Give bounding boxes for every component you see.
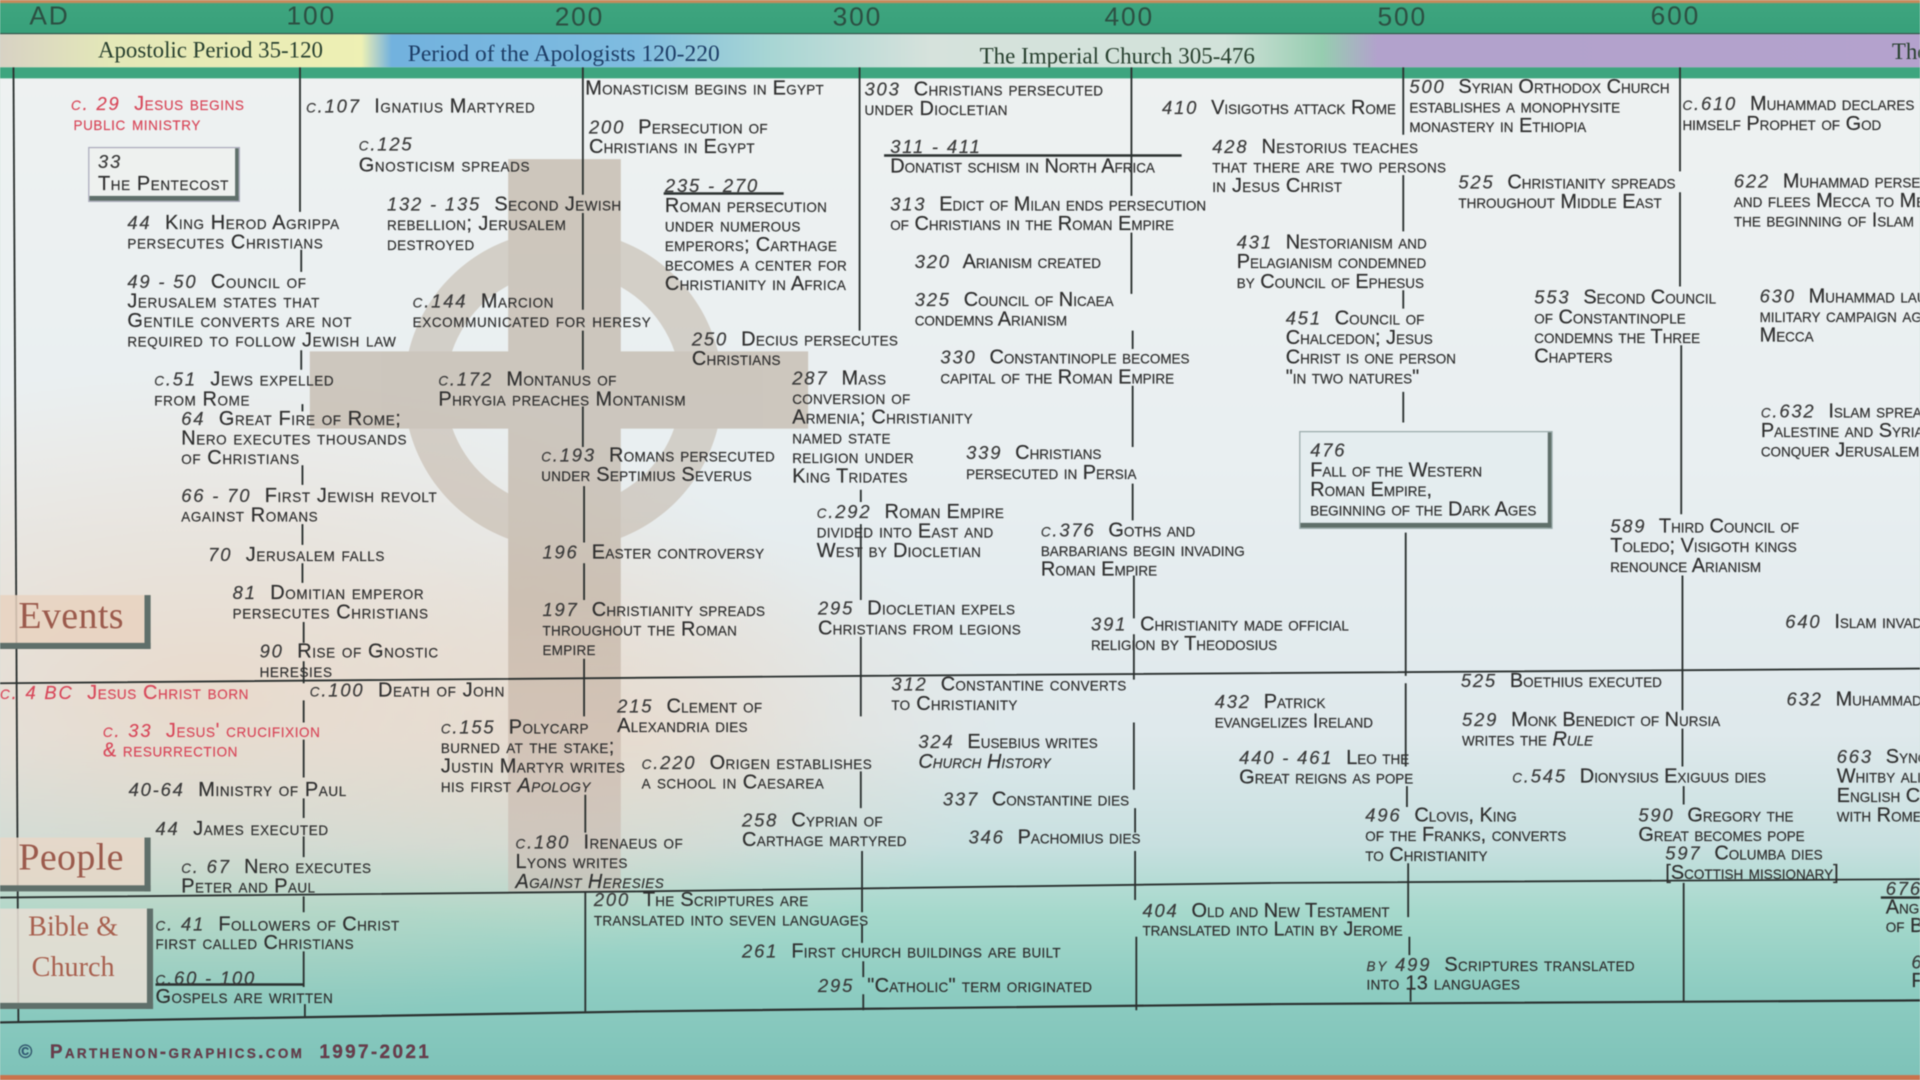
event c.610 bbox=[1682, 94, 1914, 133]
person 529 bbox=[1462, 710, 1720, 749]
person 215 bbox=[617, 697, 762, 736]
event 451: Chalcedon; Jesus bbox=[1286, 327, 1433, 349]
person 529: 529 Monk Benedict of Nursia bbox=[1462, 709, 1720, 731]
event 197: throughout the Roman bbox=[542, 618, 737, 640]
event 287: King Tridates bbox=[792, 465, 908, 487]
church clipped entry bbox=[1911, 954, 1920, 991]
event 81: persecutes Christians bbox=[233, 601, 429, 623]
church 200: 200 The Scriptures are bbox=[594, 889, 808, 911]
person c.67: Peter and Paul bbox=[181, 876, 315, 898]
church c.60-100: c.60 - 100 bbox=[156, 969, 256, 989]
event 525 bbox=[1458, 173, 1676, 212]
event 81 bbox=[232, 582, 429, 623]
person c.33: c. 33 Jesus' crucifixion bbox=[103, 720, 320, 742]
event 200: 200 Persecution of bbox=[589, 116, 768, 138]
event 428: in Jesus Christ bbox=[1212, 175, 1342, 197]
event 66-70 bbox=[180, 485, 438, 527]
person 525: 525 Boethius executed bbox=[1461, 670, 1662, 692]
scale label AD: AD bbox=[29, 1, 70, 31]
event 287: Armenia; Christianity bbox=[792, 407, 973, 429]
event 431: 431 Nestorianism and bbox=[1237, 231, 1427, 253]
event 525: 525 Christianity spreads bbox=[1458, 171, 1676, 193]
event 630: Mecca bbox=[1760, 324, 1814, 347]
event 553: of Constantinople bbox=[1534, 306, 1686, 328]
church c.41: first called Christians bbox=[156, 932, 354, 954]
scale label 100: 100 bbox=[287, 1, 336, 31]
event 235-270: under numerous bbox=[665, 214, 801, 236]
section label: bible and church bbox=[0, 909, 153, 1009]
person 432 bbox=[1215, 692, 1373, 731]
label text: events: Events bbox=[18, 594, 124, 637]
person 440-461: Great reigns as pope bbox=[1239, 767, 1413, 789]
event 90: heresies bbox=[260, 660, 333, 682]
event 49-50: required to follow Jewish law bbox=[127, 329, 397, 351]
period: Apologists: Period of the Apologists 120-220 bbox=[408, 42, 720, 67]
person 44: 44 James executed bbox=[156, 818, 329, 840]
callout text: fall of Rome bbox=[1310, 441, 1537, 520]
event c.107: c.107 Ignatius Martyred bbox=[306, 96, 535, 118]
green strip under periods bbox=[0, 67, 1920, 78]
person 324: Church History bbox=[918, 751, 1051, 773]
event 90 bbox=[260, 640, 439, 682]
event 64: Nero executes thousands bbox=[181, 427, 407, 449]
event 64 bbox=[181, 408, 407, 469]
person c.33: & resurrection bbox=[103, 740, 238, 762]
event 428: that there are two persons bbox=[1212, 156, 1446, 178]
church c.60-100: Gospels are written bbox=[156, 986, 333, 1008]
callout text: fall of Rome: 476 bbox=[1310, 441, 1346, 462]
event 311-411 bbox=[890, 137, 1156, 178]
panel: bible and church bbox=[0, 898, 1920, 1014]
event 70: 70 Jerusalem falls bbox=[208, 544, 385, 566]
event c.51: c.51 Jews expelled bbox=[154, 369, 334, 391]
callout text: fall of Rome: Roman Empire, bbox=[1310, 479, 1432, 501]
event c.144: excommunicated for heresy bbox=[413, 310, 651, 332]
person 590 bbox=[1638, 806, 1805, 845]
bottom orange border bbox=[0, 1075, 1920, 1080]
event c.610: c.610 Muhammad declares bbox=[1682, 93, 1914, 115]
panel: events bbox=[0, 76, 1920, 682]
person 346: 346 Pachomius dies bbox=[969, 827, 1140, 849]
person 597 bbox=[1665, 844, 1839, 883]
event c.193: under Septimius Severus bbox=[541, 464, 752, 486]
event 235-270: emperors; Carthage bbox=[665, 234, 837, 256]
person 432: evangelizes Ireland bbox=[1215, 710, 1373, 732]
person c.67 bbox=[181, 857, 371, 896]
event 64: 64 Great Fire of Rome; bbox=[181, 408, 401, 430]
person c.4 BC: c. 4 BC Jesus Christ born bbox=[0, 682, 249, 704]
event 313 bbox=[890, 193, 1206, 235]
event 66-70: 66 - 70 First Jewish revolt bbox=[181, 485, 437, 507]
event 330: capital of the Roman Empire bbox=[940, 366, 1174, 388]
event 391: religion by Theodosius bbox=[1091, 633, 1277, 655]
event 311-411: Donatist schism in North Africa bbox=[890, 156, 1155, 178]
event c.632 bbox=[1761, 402, 1920, 460]
event 49-50: 49 - 50 Council of bbox=[127, 271, 307, 293]
event 325: condemns Arianism bbox=[915, 309, 1067, 331]
event c.172: c.172 Montanus of bbox=[438, 369, 617, 391]
event 66-70: against Romans bbox=[181, 504, 318, 527]
event 391: 391 Christianity made official bbox=[1091, 613, 1349, 636]
event 200 bbox=[588, 116, 768, 158]
event 303 bbox=[864, 78, 1104, 120]
person c.220: a school in Caesarea bbox=[642, 771, 824, 793]
label text: bible and church: Bible & bbox=[28, 911, 118, 942]
event 303: 303 Christians persecuted bbox=[864, 78, 1103, 100]
church 404 bbox=[1142, 902, 1403, 938]
panel: people bbox=[0, 686, 1920, 894]
event 64: of Christians bbox=[181, 447, 300, 469]
person c.67: c. 67 Nero executes bbox=[181, 856, 371, 878]
event 235-270: Roman persecution bbox=[665, 195, 827, 217]
event 200: Christians in Egypt bbox=[589, 136, 755, 158]
event c.292: c.292 Roman Empire bbox=[817, 501, 1004, 523]
event 339: persecuted in Persia bbox=[966, 462, 1136, 484]
person c.220: c.220 Origen establishes bbox=[642, 752, 872, 774]
event 428: 428 Nestorius teaches bbox=[1212, 136, 1418, 158]
event 431 bbox=[1236, 231, 1427, 293]
event monasticism: Monasticism begins in Egypt bbox=[585, 77, 824, 99]
person 312 bbox=[891, 675, 1126, 714]
event 320: 320 Arianism created bbox=[915, 251, 1101, 273]
event 132-135: rebellion; Jerusalem bbox=[387, 213, 566, 235]
event 196: 196 Easter controversy bbox=[542, 541, 764, 563]
scale label 600: 600 bbox=[1651, 1, 1700, 31]
callout: fall of Rome bbox=[1300, 432, 1551, 528]
event c.376 bbox=[1040, 519, 1245, 580]
event 250: Christians bbox=[692, 348, 781, 370]
event 325: 325 Council of Nicaea bbox=[915, 289, 1114, 311]
person c.155: burned at the stake; bbox=[441, 736, 615, 758]
person c.180: Lyons writes bbox=[516, 851, 628, 873]
person 529: writes the Rule bbox=[1462, 729, 1593, 751]
event 589: renounce Arianism bbox=[1610, 555, 1761, 577]
event 428 bbox=[1212, 136, 1446, 197]
person 590: Great becomes pope bbox=[1638, 824, 1805, 846]
church by 499 bbox=[1367, 956, 1635, 992]
event c.144: c.144 Marcion bbox=[413, 290, 554, 312]
church 295: 295 "Catholic" term originated bbox=[818, 975, 1092, 997]
event 250 bbox=[691, 328, 898, 370]
event 132-135 bbox=[386, 193, 622, 255]
period: Apostolic: Apostolic Period 35-120 bbox=[98, 38, 323, 64]
event c.172 bbox=[438, 369, 686, 410]
person 496: to Christianity bbox=[1365, 844, 1488, 866]
church c.41: c. 41 Followers of Christ bbox=[156, 913, 400, 936]
event 589: 589 Third Council of bbox=[1610, 516, 1799, 538]
event c.376: Roman Empire bbox=[1041, 558, 1157, 580]
event 451: "in two natures" bbox=[1286, 366, 1419, 388]
person 312: 312 Constantine converts bbox=[891, 673, 1126, 696]
event 553: condemns the Three bbox=[1534, 326, 1700, 348]
event 325 bbox=[914, 289, 1114, 331]
event 431: by Council of Ephesus bbox=[1237, 271, 1424, 293]
event c.376: c.376 Goths and bbox=[1041, 519, 1195, 541]
event 132-135: 132 - 135 Second Jewish bbox=[387, 193, 622, 216]
event 287: named state bbox=[792, 426, 891, 448]
event 500: 500 Syrian Orthodox Church bbox=[1409, 76, 1670, 98]
event 622: the beginning of Islam bbox=[1734, 209, 1914, 231]
person 312: to Christianity bbox=[891, 693, 1018, 715]
person c.180: Against Heresies bbox=[516, 871, 664, 893]
person 337: 337 Constantine dies bbox=[943, 789, 1129, 811]
person 324 bbox=[918, 732, 1098, 771]
event 313: 313 Edict of Milan ends persecution bbox=[890, 193, 1206, 216]
person c.180 bbox=[516, 833, 683, 891]
scale label 500: 500 bbox=[1378, 2, 1427, 32]
event 250: 250 Decius persecutes bbox=[692, 328, 898, 350]
event c.29: c. 29 Jesus begins bbox=[71, 93, 245, 115]
event 339: 339 Christians bbox=[966, 442, 1101, 464]
event 622 bbox=[1734, 171, 1920, 230]
event 197 bbox=[542, 599, 766, 660]
person 258: 258 Cyprian of bbox=[742, 809, 883, 831]
event c.292: divided into East and bbox=[817, 520, 994, 542]
event 431: Pelagianism condemned bbox=[1237, 251, 1426, 273]
event 303: under Diocletian bbox=[864, 98, 1008, 120]
church 200: translated into seven languages bbox=[594, 909, 868, 931]
event 49-50: Jerusalem states that bbox=[127, 290, 320, 312]
event 313: of Christians in the Roman Empire bbox=[890, 213, 1174, 235]
event 49-50 bbox=[126, 271, 397, 351]
church 404: 404 Old and New Testament bbox=[1142, 900, 1390, 922]
person 432: 432 Patrick bbox=[1215, 691, 1325, 713]
event c.632: conquer Jerusalem bbox=[1761, 440, 1919, 462]
label text: people: People bbox=[18, 835, 124, 878]
person c.220 bbox=[642, 753, 872, 792]
event 451: 451 Council of bbox=[1286, 307, 1424, 329]
person 215: 215 Clement of bbox=[617, 696, 762, 718]
church by 499: by 499 Scriptures translated bbox=[1367, 954, 1635, 976]
person 663 bbox=[1837, 747, 1920, 825]
event c.51 bbox=[154, 369, 334, 410]
person 258: Carthage martyred bbox=[742, 829, 907, 851]
person 496: of the Franks, converts bbox=[1365, 824, 1566, 846]
event c.172: Phrygia preaches Montanism bbox=[438, 388, 686, 410]
scale label 200: 200 bbox=[555, 2, 604, 32]
event 287: 287 Mass bbox=[792, 367, 886, 389]
person c.180: c.180 Irenaeus of bbox=[516, 831, 683, 853]
callout text: fall of Rome: Fall of the Western bbox=[1310, 459, 1482, 481]
event c.193 bbox=[541, 444, 775, 486]
event 630 bbox=[1760, 287, 1920, 345]
header band: century scale bbox=[0, 0, 1920, 34]
event 589 bbox=[1610, 517, 1799, 576]
event 90: 90 Rise of Gnostic bbox=[260, 640, 439, 662]
label text: bible and church: Church bbox=[32, 951, 115, 982]
event c.125 bbox=[358, 135, 530, 176]
person 40-64: 40-64 Ministry of Paul bbox=[129, 779, 347, 801]
period band bbox=[0, 34, 1920, 67]
event 197: 197 Christianity spreads bbox=[542, 599, 765, 621]
event 81: 81 Domitian emperor bbox=[233, 582, 424, 604]
event 525: throughout Middle East bbox=[1458, 191, 1662, 213]
person 590: 590 Gregory the bbox=[1638, 804, 1794, 827]
person c.33 bbox=[103, 721, 320, 760]
person c.155: his first Apology bbox=[441, 775, 591, 797]
event c.610: himself Prophet of God bbox=[1682, 113, 1881, 135]
event 330: 330 Constantinople becomes bbox=[940, 347, 1190, 369]
church 676 bbox=[1886, 880, 1920, 936]
event 451: Christ is one person bbox=[1286, 347, 1456, 369]
person c.155: c.155 Polycarp bbox=[441, 716, 589, 738]
event c.144 bbox=[412, 290, 651, 332]
scale label 400: 400 bbox=[1104, 2, 1154, 32]
period: Imperial Church: The Imperial Church 305-476 bbox=[980, 44, 1255, 70]
event 287: conversion of bbox=[792, 387, 911, 409]
callout text: the Pentecost: 33 bbox=[98, 152, 122, 173]
callout text: the Pentecost: The Pentecost bbox=[98, 173, 229, 195]
event 500: monastery in Ethiopia bbox=[1409, 115, 1586, 137]
church c.60-100 bbox=[156, 970, 333, 1007]
event 235-270: 235 - 270 bbox=[665, 176, 759, 197]
event 49-50: Gentile converts are not bbox=[127, 310, 352, 332]
event c.125: c.125 bbox=[359, 135, 413, 156]
event c.193: c.193 Romans persecuted bbox=[541, 444, 775, 467]
church c.41 bbox=[156, 916, 400, 953]
person c.155: Justin Martyr writes bbox=[441, 756, 625, 778]
person 496 bbox=[1365, 806, 1566, 864]
event 295: 295 Diocletian expels bbox=[818, 598, 1015, 620]
callout text: fall of Rome: beginning of the Dark Ages bbox=[1310, 498, 1536, 520]
event 235-270: Christianity in Africa bbox=[665, 273, 846, 295]
event 44: persecutes Christians bbox=[127, 231, 323, 253]
event 553: Chapters bbox=[1534, 345, 1612, 367]
church by 499: into 13 languages bbox=[1367, 972, 1520, 994]
event 500 bbox=[1409, 76, 1670, 137]
event 287: religion under bbox=[792, 446, 914, 468]
event 451 bbox=[1285, 307, 1456, 388]
event 44: 44 King Herod Agrippa bbox=[127, 212, 340, 234]
event 553 bbox=[1534, 288, 1716, 366]
person 597: 597 Columba dies bbox=[1665, 842, 1823, 864]
event 410: 410 Visigoths attack Rome bbox=[1162, 97, 1396, 119]
person 258 bbox=[742, 811, 907, 850]
event 391 bbox=[1090, 613, 1350, 655]
event 500: establishes a monophysite bbox=[1409, 96, 1620, 118]
event 44 bbox=[126, 212, 340, 253]
person c.155 bbox=[441, 718, 625, 796]
event 553: 553 Second Council bbox=[1534, 287, 1716, 309]
event 235-270 bbox=[664, 176, 847, 295]
person 496: 496 Clovis, King bbox=[1365, 804, 1517, 827]
section label: people bbox=[0, 838, 151, 891]
event c.29: public ministry bbox=[73, 113, 201, 135]
church 200 bbox=[594, 890, 868, 929]
person 440-461: 440 - 461 Leo the bbox=[1239, 747, 1409, 769]
footer copyright: © Parthenon-graphics.com 1997-2021 bbox=[18, 1042, 431, 1063]
event 339 bbox=[966, 442, 1137, 484]
event c.51: from Rome bbox=[154, 388, 250, 410]
event c.292 bbox=[816, 501, 1004, 562]
person 597: [Scottish missionary] bbox=[1665, 862, 1839, 884]
event c.292: West by Diocletian bbox=[817, 540, 981, 562]
person 440-461 bbox=[1239, 748, 1413, 787]
person c.100: c.100 Death of John bbox=[310, 680, 505, 702]
person 663: with Rome bbox=[1837, 804, 1920, 827]
scale label 300: 300 bbox=[833, 2, 882, 32]
event c.125: Gnosticism spreads bbox=[359, 154, 530, 176]
event 311-411: 311 - 411 bbox=[890, 137, 982, 158]
label text: bible and church bbox=[28, 906, 118, 987]
person 215: Alexandria dies bbox=[617, 715, 748, 737]
callout: the Pentecost bbox=[89, 148, 239, 201]
person c.545: c.545 Dionysius Exiguus dies bbox=[1512, 765, 1766, 787]
event 132-135: destroyed bbox=[387, 233, 475, 255]
section label: events bbox=[0, 595, 151, 649]
event 295 bbox=[817, 598, 1021, 639]
event 589: Toledo; Visigoth kings bbox=[1610, 535, 1797, 557]
event 287 bbox=[792, 367, 973, 487]
event c.29 bbox=[70, 93, 245, 135]
event 295: Christians from legions bbox=[818, 617, 1021, 639]
church 404: translated into Latin by Jerome bbox=[1142, 918, 1403, 940]
person 324: 324 Eusebius writes bbox=[918, 731, 1098, 753]
church 261: 261 First church buildings are built bbox=[742, 940, 1061, 962]
callout text: the Pentecost bbox=[98, 152, 229, 195]
event c.376: barbarians begin invading bbox=[1041, 539, 1245, 561]
event 235-270: becomes a center for bbox=[665, 253, 847, 276]
event 197: empire bbox=[542, 638, 596, 660]
event 330 bbox=[940, 347, 1190, 388]
